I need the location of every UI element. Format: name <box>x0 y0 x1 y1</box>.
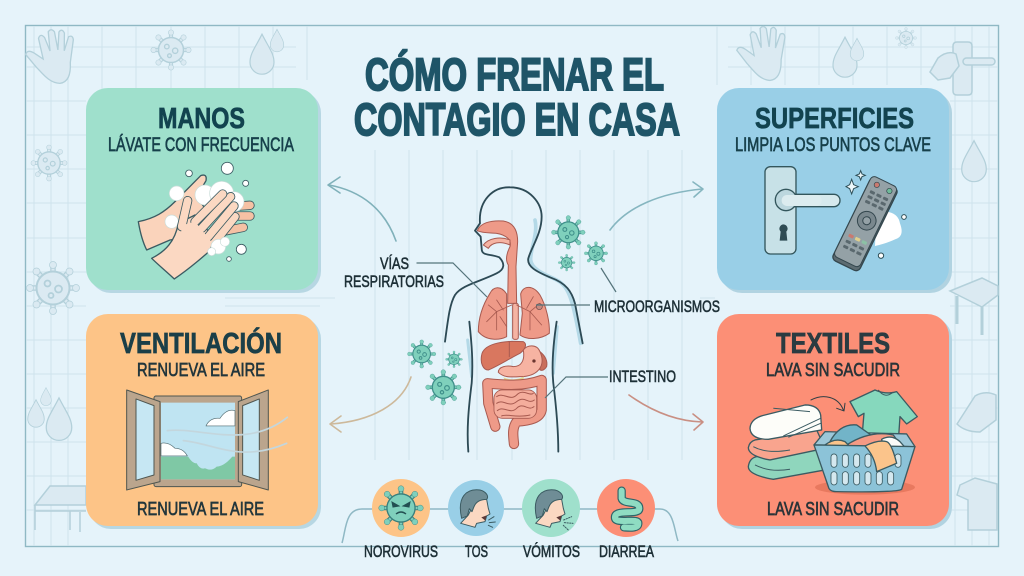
heading: superficies: SUPERFICIES <box>755 103 914 135</box>
organ: airway <box>477 221 518 339</box>
subheading: lávate con frecuencia: LÁVATE CON FRECUENCIA <box>108 133 294 156</box>
icon: washing hands <box>138 162 250 279</box>
label: vías respiratorias: RESPIRATORIAS <box>344 272 444 291</box>
central anatomy figure <box>408 187 608 452</box>
subheading: lava sin sacudir: LAVA SIN SACUDIR <box>766 360 900 380</box>
symptom: vómitos: VÓMITOS <box>523 542 580 561</box>
icon: laundry <box>748 390 917 495</box>
caption: lava sin sacudir: LAVA SIN SACUDIR <box>767 499 899 519</box>
panel: superficies <box>717 88 952 293</box>
arrow: body to superficies <box>610 182 703 230</box>
caption: renueva el aire: RENUEVA EL AIRE <box>137 499 264 519</box>
arrow: body to manos <box>328 177 396 241</box>
panel: manos <box>86 88 321 293</box>
label: vías respiratorias: VÍAS <box>380 254 409 273</box>
label: microorganismos: MICROORGANISMOS <box>594 297 720 316</box>
symptom: diarrea: DIARREA <box>599 542 654 561</box>
subheading: renueva el aire: RENUEVA EL AIRE <box>137 360 265 380</box>
connector line <box>342 509 678 543</box>
subheading: limpia los puntos clave: LIMPIA LOS PUNTOS CLAVE <box>735 134 931 156</box>
leader lines <box>416 263 616 398</box>
icon: open window <box>127 390 287 490</box>
title: CÓMO FRENAR EL <box>365 49 664 100</box>
viruses near chest <box>552 216 608 271</box>
arrow: body to ventilación <box>330 377 411 432</box>
organ: intestines <box>487 380 542 444</box>
symptom: tos <box>448 480 504 561</box>
body outline <box>445 187 583 452</box>
symptom: diarrea <box>597 479 655 561</box>
title <box>354 49 680 145</box>
organ: liver and stomach <box>481 341 547 381</box>
arrow: body to textiles <box>629 395 703 430</box>
heading: ventilación: VENTILACIÓN <box>120 326 282 360</box>
heading: manos: MANOS <box>158 103 245 135</box>
symptom: norovirus <box>364 479 438 561</box>
panel: textiles <box>717 314 952 529</box>
organ: lungs <box>478 287 549 339</box>
symptom: vómitos <box>522 479 580 561</box>
viruses near abdomen <box>408 340 462 405</box>
label: intestino: INTESTINO <box>609 367 676 386</box>
icon: door handle <box>765 167 840 254</box>
heading: textiles: TEXTILES <box>776 328 890 360</box>
symptom: norovirus: NOROVIRUS <box>364 542 438 561</box>
icon: remote control <box>831 171 906 272</box>
symptom: tos: TOS <box>465 542 488 561</box>
panel: ventilación <box>86 314 321 529</box>
title: CONTAGIO EN CASA <box>354 94 680 145</box>
label: vías respiratorias <box>344 254 444 291</box>
